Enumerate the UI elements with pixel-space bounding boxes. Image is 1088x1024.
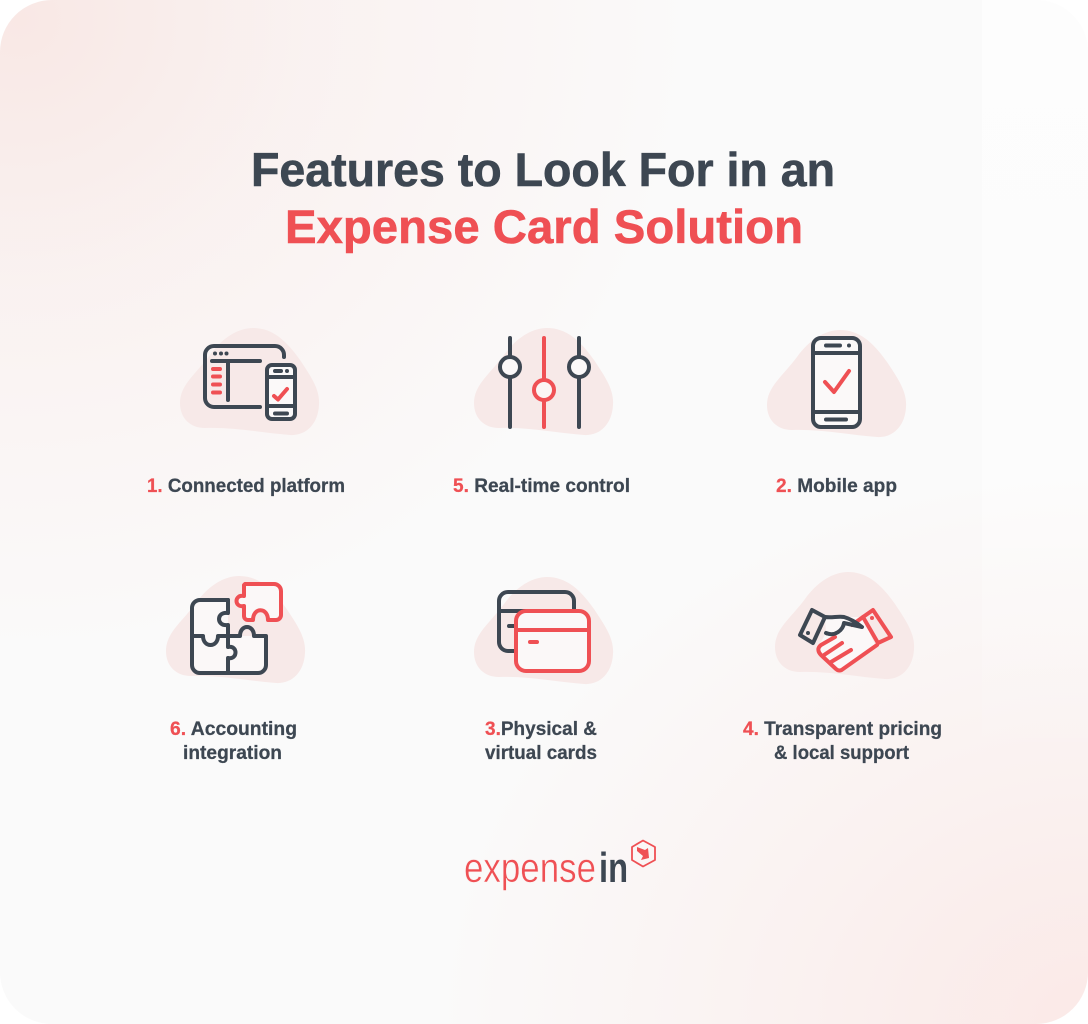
label: accounting integration: 6. Accounting — [170, 718, 297, 740]
label: transparent pricing and local support: 4. Transparent pricing — [743, 718, 942, 740]
feature: physical and virtual cards — [474, 577, 613, 764]
icon: browser and phone — [180, 328, 319, 435]
icon: logo hexagon — [632, 840, 655, 866]
feature: real-time control — [453, 328, 630, 497]
logo: expensein: expense — [464, 844, 596, 891]
icon: mobile phone — [767, 330, 906, 437]
feature: connected platform — [147, 328, 345, 497]
feature: mobile app — [767, 330, 906, 497]
logo: expensein: in — [599, 844, 628, 891]
label: connected platform: 1. Connected platform — [147, 475, 345, 497]
label: accounting integration — [170, 718, 297, 764]
feature: accounting integration — [166, 576, 305, 764]
label: physical and virtual cards — [485, 718, 597, 764]
label: physical and virtual cards: 3.Physical & — [485, 718, 597, 740]
label: real-time control: 5. Real-time control — [453, 475, 630, 497]
title: Expense Card Solution — [285, 200, 803, 253]
icon: puzzle pieces — [166, 576, 305, 683]
label: transparent pricing and local support — [743, 718, 942, 764]
icon: credit cards — [474, 577, 613, 684]
label: mobile app: 2. Mobile app — [776, 475, 897, 497]
icon: handshake — [775, 572, 914, 679]
label: transparent pricing and local support: & local support — [774, 742, 909, 764]
title — [251, 143, 835, 253]
icon: sliders — [474, 328, 613, 435]
label: physical and virtual cards: virtual cards — [485, 742, 597, 764]
feature: transparent pricing and local support — [743, 572, 942, 764]
title: Features to Look For in an — [251, 143, 835, 196]
label: accounting integration: integration — [183, 742, 282, 764]
